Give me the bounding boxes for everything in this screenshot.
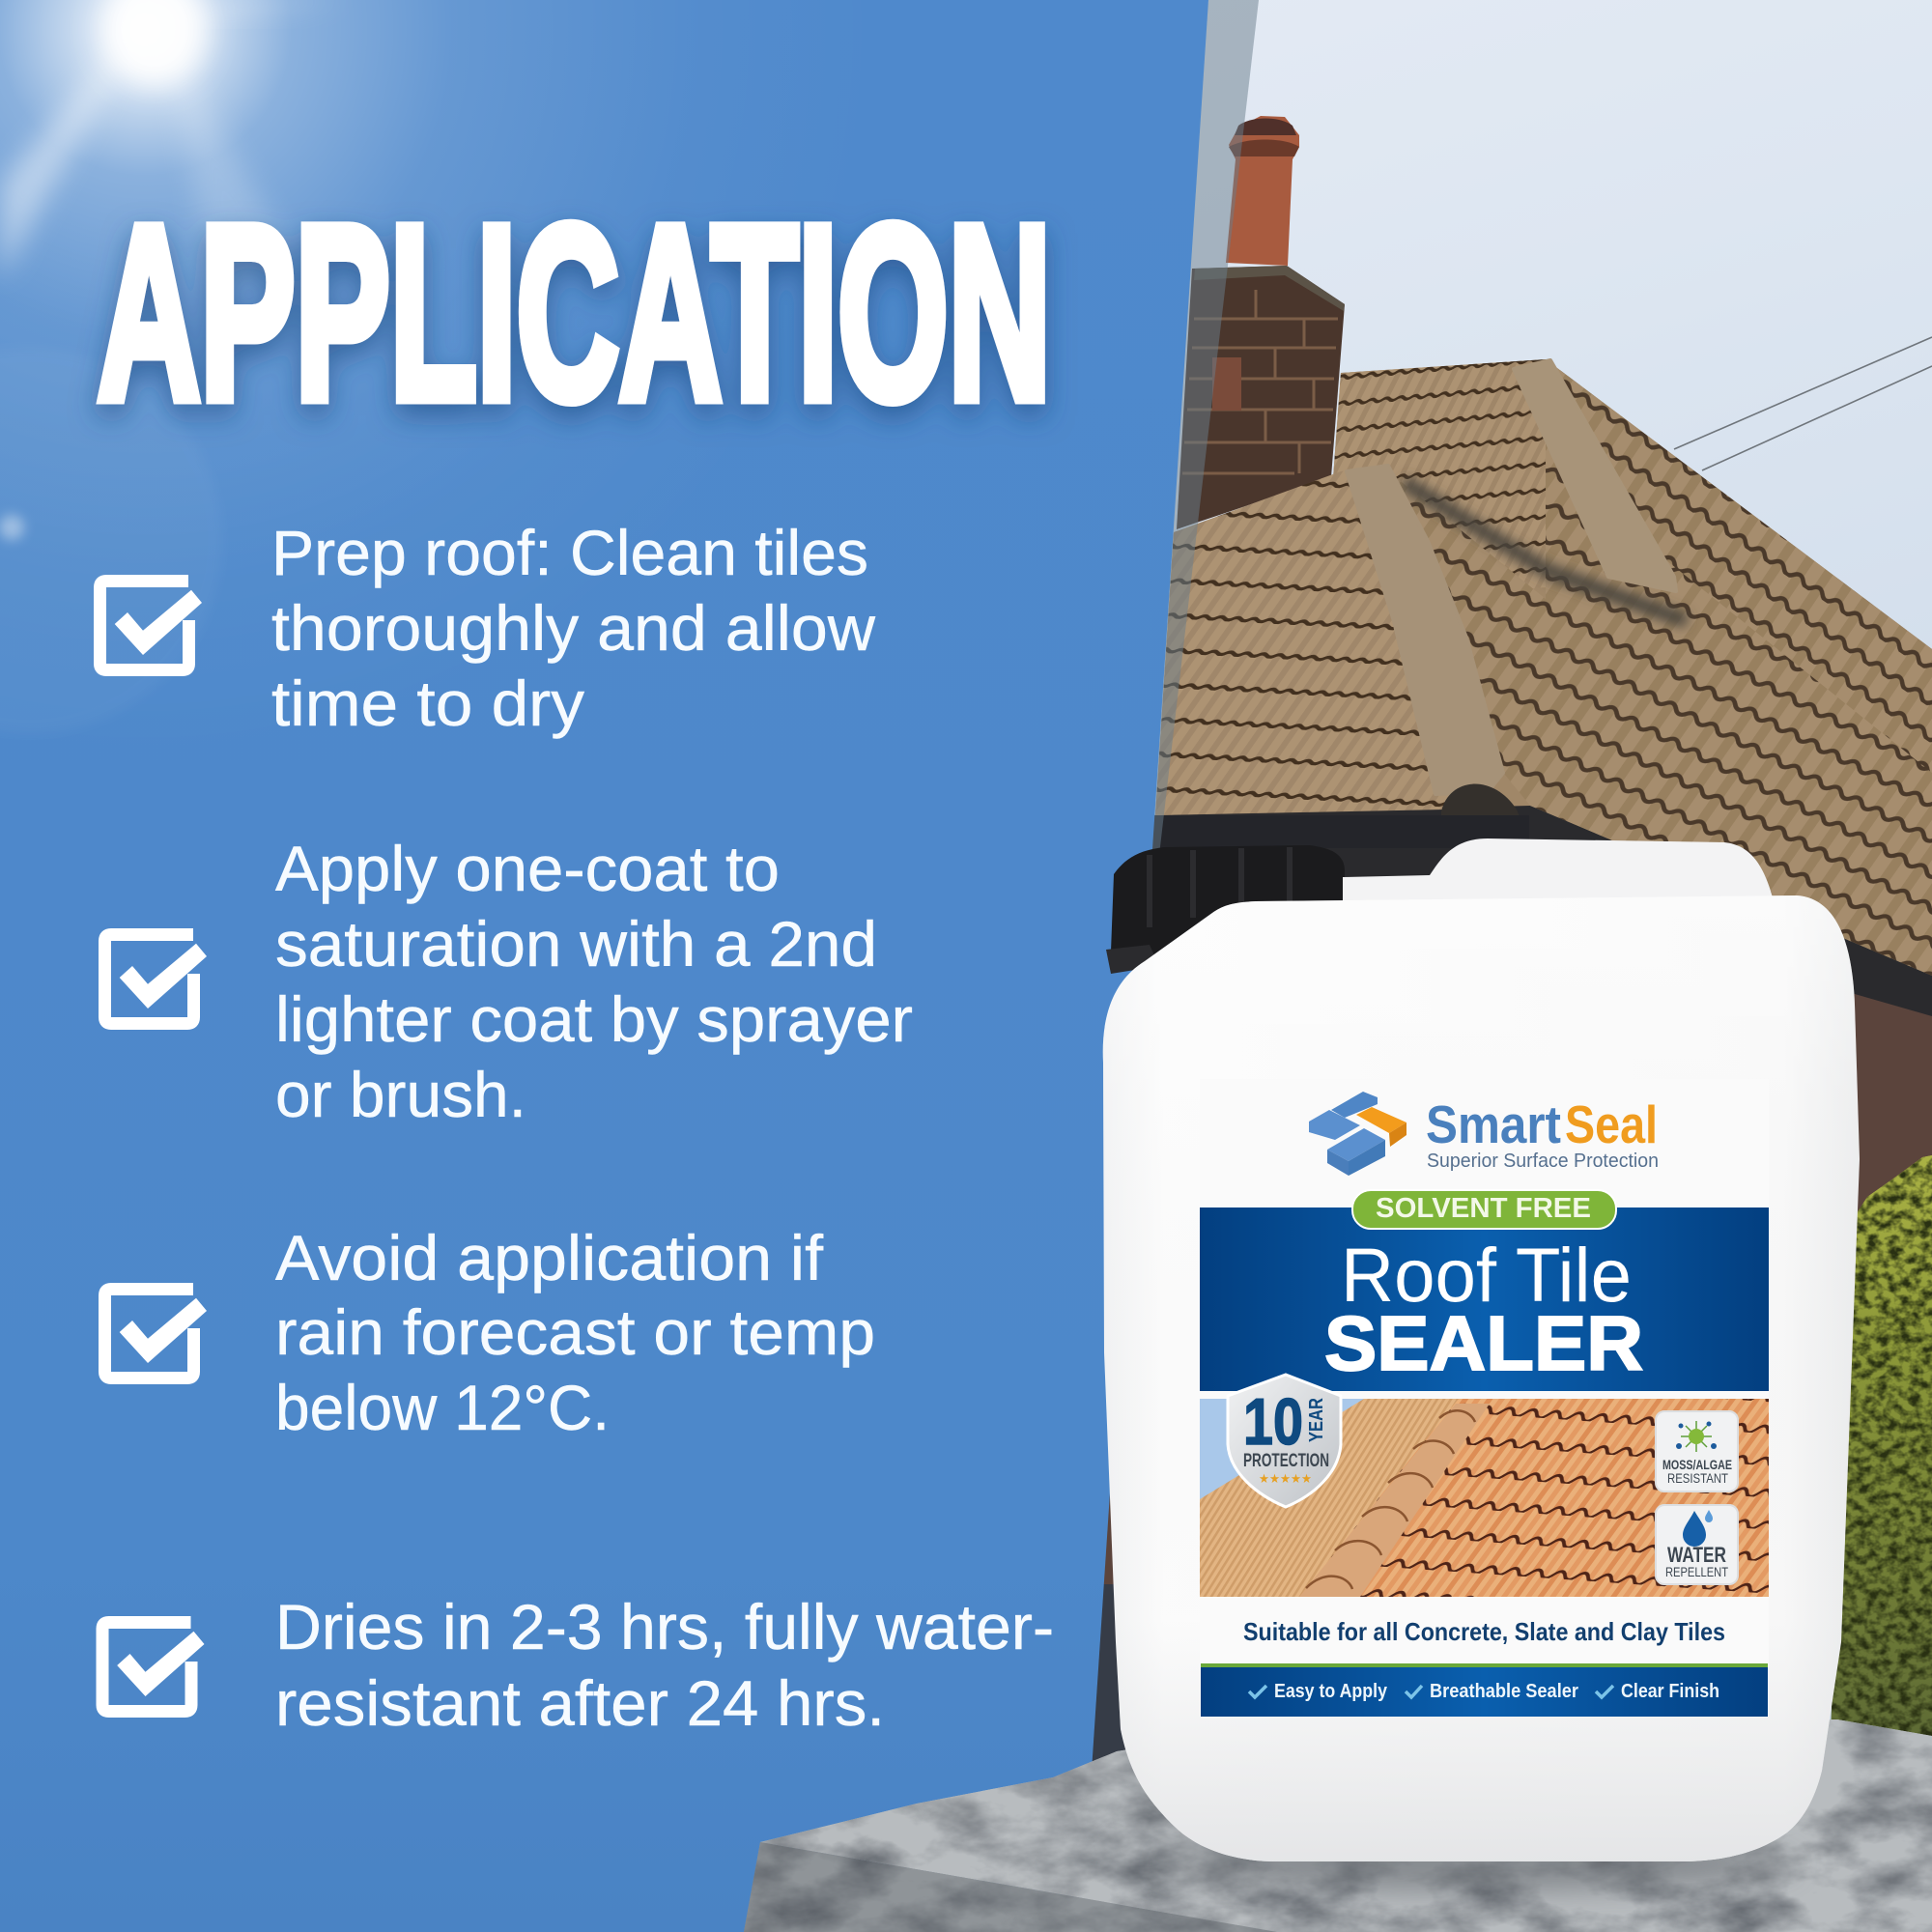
solvent free pill: SOLVENT FREE xyxy=(1376,1193,1591,1224)
badge: water repellent xyxy=(1656,1505,1738,1584)
suitability line: Suitable for all Concrete, Slate and Clay Tiles xyxy=(1243,1617,1725,1646)
chimney pot xyxy=(1226,116,1299,266)
lower hip ridge xyxy=(1347,466,1503,794)
step 1 text: time to dry xyxy=(271,668,584,739)
title: APPLICATION xyxy=(98,175,1051,451)
lower ridge end cap xyxy=(1441,784,1521,821)
product jug xyxy=(1103,838,1860,1861)
step 4 text: Dries in 2-3 hrs, fully water- xyxy=(275,1591,1054,1662)
gutter xyxy=(1152,815,1529,848)
stone slab xyxy=(744,1719,1932,1932)
label recess crease xyxy=(1125,1066,1835,1074)
icon: checkbox 4 xyxy=(102,1623,205,1712)
jug shadow xyxy=(1159,1837,1797,1891)
badge: water repellent: WATER xyxy=(1667,1543,1726,1567)
chimney stack xyxy=(1177,266,1345,529)
logo tagline: Superior Surface Protection xyxy=(1427,1151,1659,1172)
jug cap xyxy=(1106,845,1345,974)
icon: checkbox 2 xyxy=(104,935,207,1024)
step 3 text: below 12°C. xyxy=(275,1372,610,1443)
logo wordmark: Seal xyxy=(1565,1094,1658,1154)
icon: moss spore xyxy=(1676,1421,1717,1452)
overhead wires xyxy=(1674,337,1932,470)
sun glare xyxy=(0,0,966,773)
valley line xyxy=(1404,482,1687,621)
upper hip ridge xyxy=(1514,360,1676,591)
step 4 text: resistant after 24 hrs. xyxy=(275,1667,885,1739)
blue panel xyxy=(0,0,1208,1932)
jug shading xyxy=(1103,895,1860,1861)
benefits band: Clear Finish xyxy=(1621,1681,1719,1702)
roof underlay xyxy=(1155,359,1932,976)
step 2 text: saturation with a 2nd xyxy=(275,908,877,980)
icon: checkbox 3 xyxy=(104,1289,207,1378)
protection shield xyxy=(1228,1375,1341,1507)
eaves and gutter xyxy=(1150,802,1932,1016)
main right roof plane xyxy=(1381,359,1932,976)
title band xyxy=(1200,1208,1769,1391)
ridge caps xyxy=(1299,1404,1490,1597)
badge: moss algae resistant: MOSS/ALGAE xyxy=(1662,1458,1732,1472)
step 1 text: thoroughly and allow xyxy=(271,592,875,664)
benefits band: Breathable Sealer xyxy=(1430,1681,1578,1702)
badge: moss algae resistant: RESISTANT xyxy=(1667,1471,1728,1486)
icon: water drops xyxy=(1683,1510,1713,1547)
lower left roof plane xyxy=(1155,466,1498,815)
step 3 text: rain forecast or temp xyxy=(275,1296,875,1368)
upper roof plane xyxy=(1333,359,1623,599)
step 4 xyxy=(102,1591,1054,1739)
roof tile photo xyxy=(1200,1399,1769,1597)
bush xyxy=(1831,1155,1932,1739)
logo mark xyxy=(1309,1092,1406,1176)
step 1 text: Prep roof: Clean tiles xyxy=(271,517,868,588)
green rule xyxy=(1201,1663,1768,1667)
brick wall xyxy=(1082,840,1932,1768)
step 1 xyxy=(100,517,875,739)
translucent stripe on the panel edge xyxy=(1092,0,1259,1005)
dark post left of jug xyxy=(1082,1584,1159,1787)
benefit checks xyxy=(1249,1686,1613,1697)
label xyxy=(1200,1079,1769,1717)
icon: checkbox 1 xyxy=(100,582,202,670)
jug body xyxy=(1103,895,1860,1861)
solvent free pill xyxy=(1352,1190,1616,1229)
step 2 xyxy=(104,833,913,1130)
product name bold: SEALER xyxy=(1324,1300,1643,1386)
step 2 text: or brush. xyxy=(275,1059,526,1130)
product name: Roof Tile xyxy=(1341,1232,1632,1318)
step 3 text: Avoid application if xyxy=(275,1222,824,1293)
protection shield: YEAR xyxy=(1306,1398,1327,1442)
badge: water repellent: REPELLENT xyxy=(1665,1564,1728,1579)
step 3 xyxy=(104,1222,875,1443)
benefits band xyxy=(1201,1667,1768,1717)
logo wordmark: Smart xyxy=(1426,1094,1561,1154)
benefits band: Easy to Apply xyxy=(1274,1681,1388,1702)
slab front face xyxy=(744,1842,1277,1932)
step 2 text: Apply one-coat to xyxy=(275,833,780,904)
protection shield: PROTECTION xyxy=(1243,1451,1329,1471)
jug handle xyxy=(1343,838,1776,927)
badge: moss algae resistant xyxy=(1656,1411,1738,1492)
protection shield: ★★★★★ xyxy=(1259,1472,1312,1487)
step 2 text: lighter coat by sprayer xyxy=(275,983,913,1055)
protection shield: 10 xyxy=(1243,1385,1303,1459)
